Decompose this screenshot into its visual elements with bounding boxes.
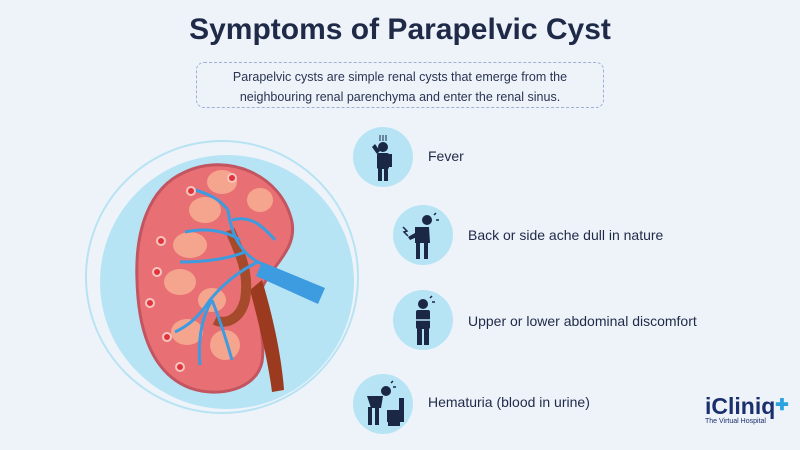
icon: abdominal [393, 290, 453, 350]
icon: fever [353, 127, 413, 187]
label: abdominal: Upper or lower abdominal discomfort [468, 313, 697, 329]
symptom: back ache [393, 205, 663, 265]
title: Symptoms of Parapelvic Cyst [189, 13, 611, 46]
icon: back ache [393, 205, 453, 265]
label: hematuria: Hematuria (blood in urine) [428, 394, 590, 410]
label: back ache: Back or side ache dull in nature [468, 227, 663, 243]
icon: hematuria [353, 374, 413, 434]
logo: iCliniq✚ [705, 393, 789, 419]
subtitle box: Parapelvic cysts are simple renal cysts that emerge from the neighbouring renal parenchyma and enter the renal sinus. [233, 70, 567, 104]
label: fever: Fever [428, 148, 464, 164]
symptom: hematuria [353, 374, 590, 434]
symptom: abdominal [393, 290, 697, 350]
logo: The Virtual Hospital [705, 418, 766, 425]
subtitle box [196, 62, 604, 108]
symptom: fever [353, 127, 464, 187]
